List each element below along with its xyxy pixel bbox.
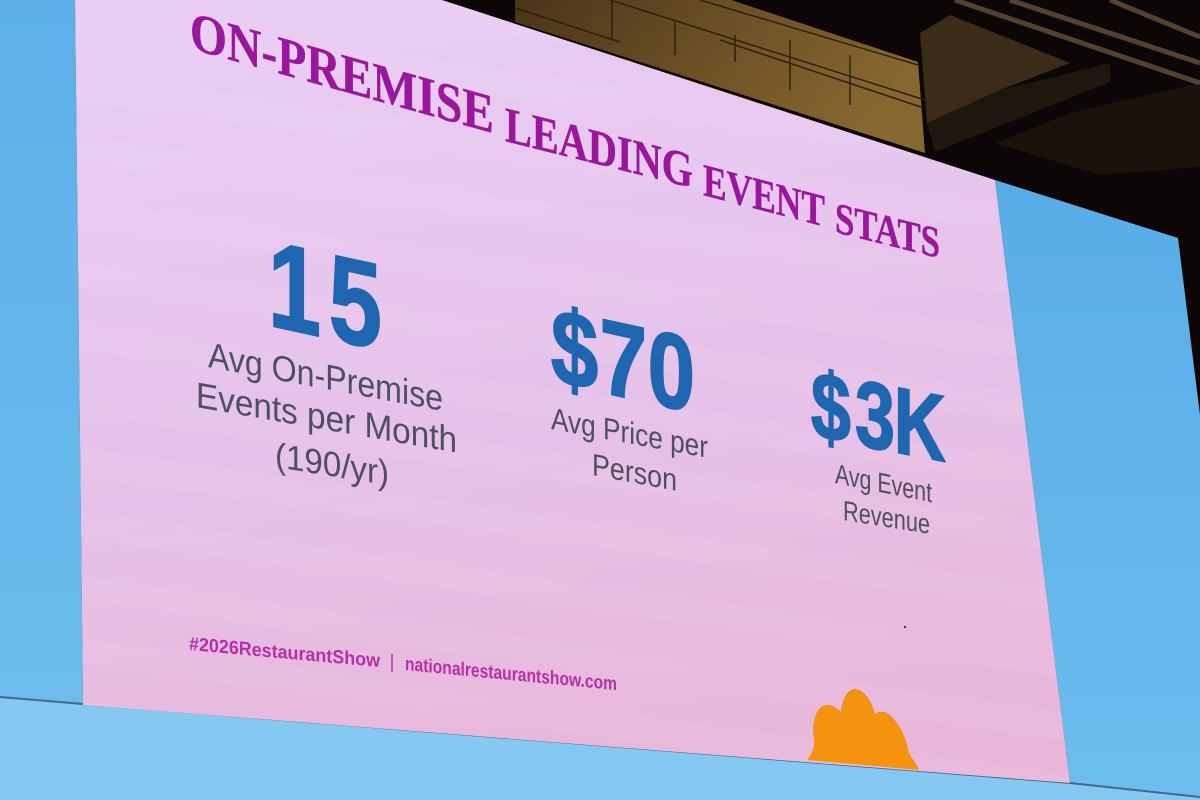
stat: 15 events per month: (190/yr) (275, 436, 389, 493)
icon: orange flower shape (807, 689, 919, 770)
title: LEADING (505, 97, 693, 199)
title: ON-PREMISE (190, 0, 494, 146)
small dark speck (904, 626, 906, 628)
stat: 15 events per month: Avg On-Premise (208, 334, 443, 419)
title: EVENT (703, 155, 825, 238)
stat: $70 price per person (551, 285, 708, 498)
blue wall: right (995, 180, 1200, 797)
stat: $70 price per person: Avg Price per (551, 401, 708, 465)
stat: $70 price per person: $70 (551, 285, 695, 436)
stat: $3K event revenue: Revenue (843, 494, 930, 540)
stat: 15 events per month (196, 216, 457, 493)
footer hashtag and website: nationalrestaurantshow.com (405, 654, 617, 695)
stat: $3K event revenue: $3K (811, 351, 945, 482)
stat: 15 events per month: Events per Month (196, 374, 457, 461)
stat: $70 price per person: Person (592, 447, 677, 498)
stat: 15 events per month: 15 (268, 216, 382, 376)
title (190, 0, 940, 268)
blue wall: left (0, 0, 83, 703)
footer hashtag and website (189, 634, 617, 695)
brick wall (515, 0, 925, 153)
stat: $3K event revenue (811, 351, 945, 540)
footer hashtag and website: #2026RestaurantShow (189, 634, 380, 672)
stat: $3K event revenue: Avg Event (835, 457, 932, 508)
title: STATS (835, 193, 940, 268)
blue ledge (0, 697, 1200, 800)
